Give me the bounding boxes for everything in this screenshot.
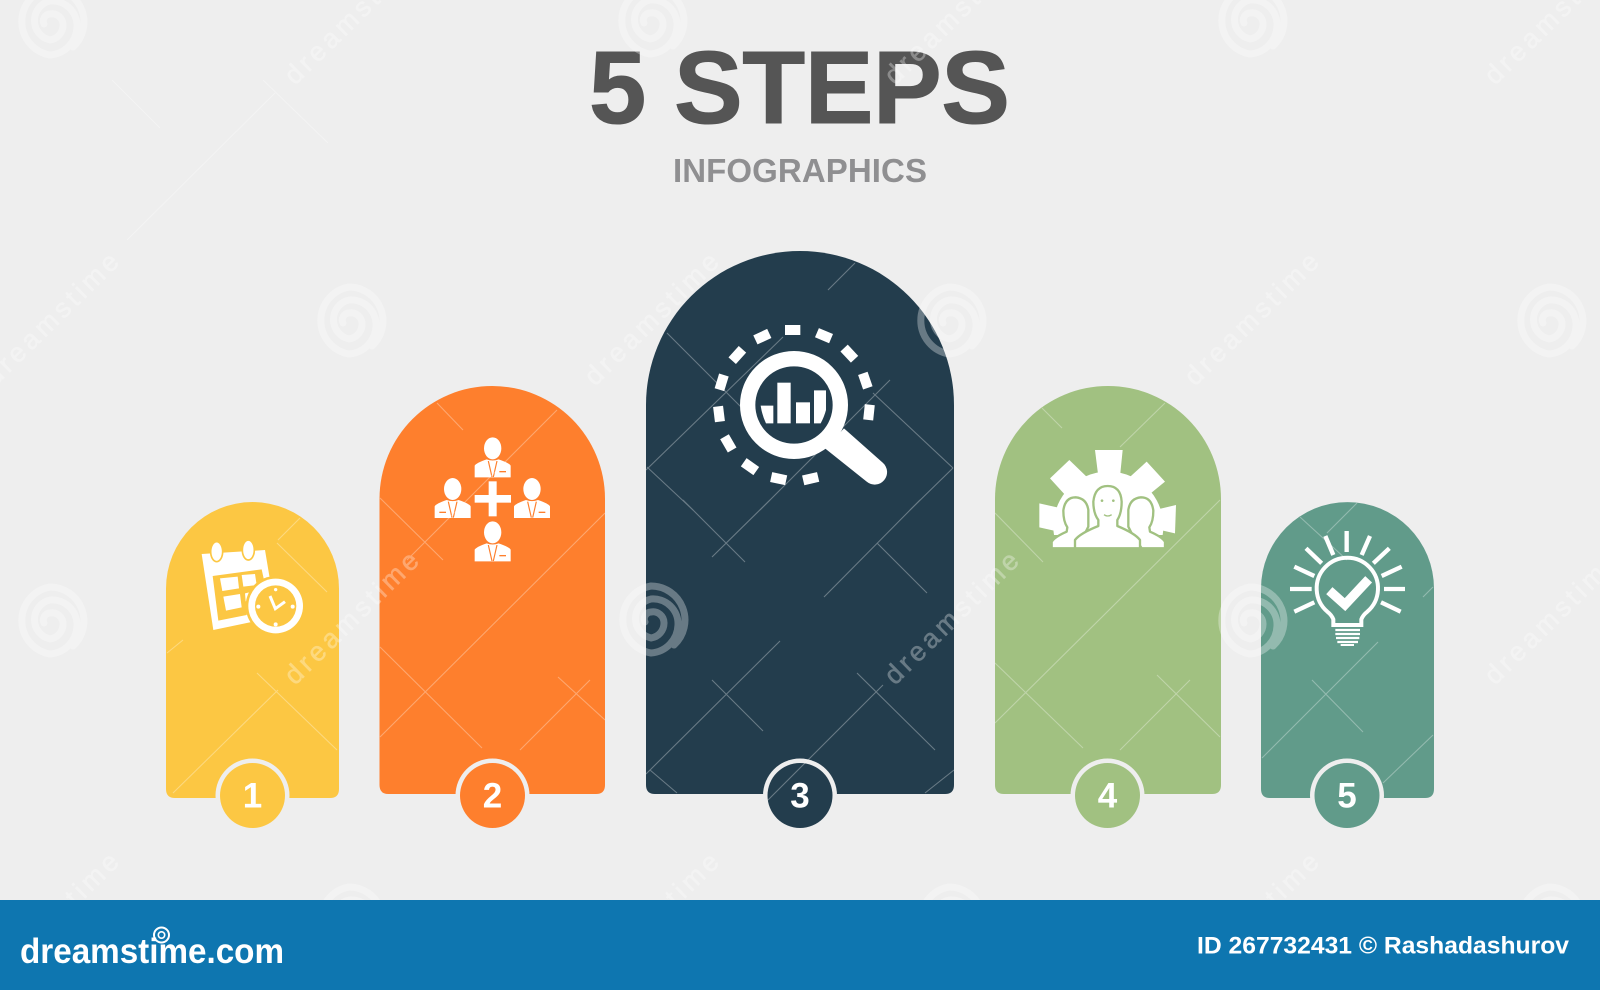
subtitle: INFOGRAPHICS <box>673 152 927 189</box>
watermark overlay: dreamstime <box>1178 247 1325 391</box>
panel: step 5 <box>1261 502 1434 798</box>
icon: people in gear <box>1039 450 1176 548</box>
icon: light bulb with check <box>1290 531 1405 645</box>
badge 5: 5 <box>1337 776 1357 816</box>
footer credit: ID 267732431 © Rashadashurov <box>1197 932 1569 960</box>
badge 2: 2 <box>483 776 502 816</box>
badge 1: 1 <box>243 776 262 816</box>
icon: calendar with clock <box>202 540 306 636</box>
panel: step 3 <box>646 251 954 794</box>
watermark overlay: dreamstime <box>278 546 425 690</box>
badge 4 <box>1070 758 1144 832</box>
watermark overlay: dreamstime <box>1178 847 1325 990</box>
badge 3: 3 <box>790 776 810 816</box>
badge 5 <box>1310 758 1384 832</box>
title: 5 STEPS <box>589 30 1010 145</box>
badge 2 <box>456 758 530 832</box>
panel: step 2 <box>380 386 605 794</box>
badge 1 <box>216 758 290 832</box>
watermark overlay: dreamstime <box>578 847 725 990</box>
watermark overlay: dreamstime <box>878 546 1025 690</box>
panel: step 1 <box>166 502 339 798</box>
watermark overlay: dreamstime <box>578 247 725 391</box>
icon: magnifier with bar chart <box>713 325 887 485</box>
icon: team with plus <box>435 437 550 561</box>
badge 4: 4 <box>1098 776 1118 816</box>
footer bar <box>0 900 1600 990</box>
footer logo: dreamstime.com <box>20 932 284 971</box>
badge 3 <box>763 758 837 832</box>
panel: step 4 <box>995 386 1221 794</box>
